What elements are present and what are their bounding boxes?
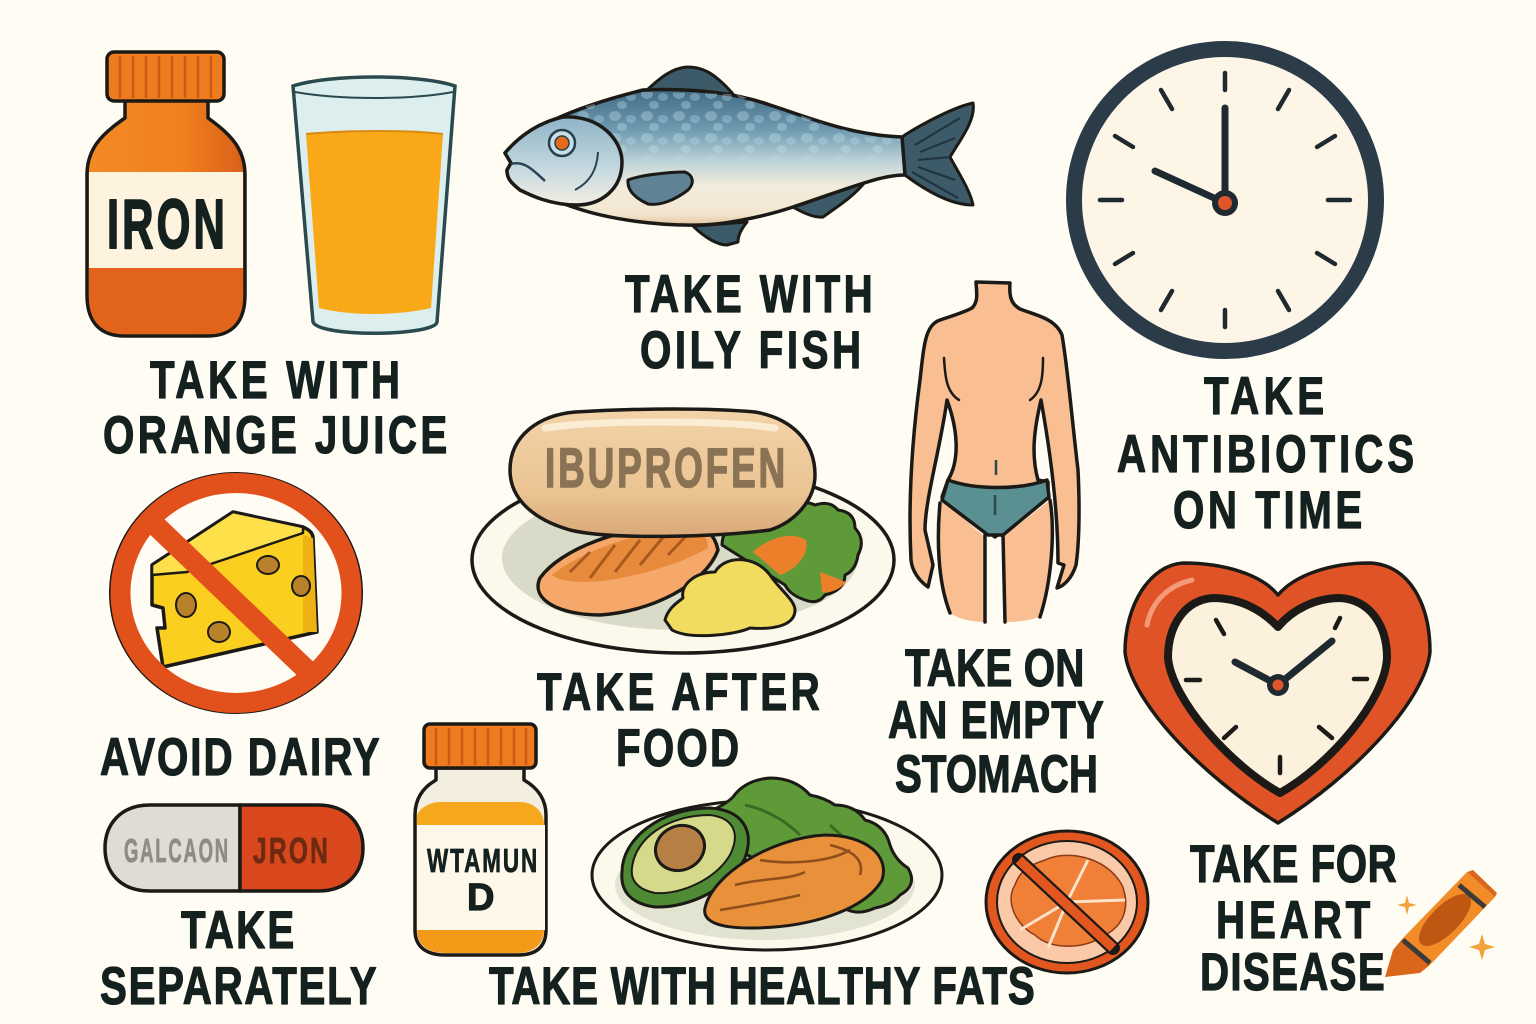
text: take with orange juice: ORANGE JUICE	[103, 405, 447, 464]
text: take separately: TAKE	[181, 900, 294, 959]
text: take for heart disease: DISEASE	[1200, 942, 1385, 1001]
text: take after food	[537, 662, 820, 777]
text: take with healthy fats: TAKE WITH HEALTHY FATS	[489, 956, 1035, 1015]
icon: calcium and iron capsule	[105, 805, 363, 891]
text: take on an empty stomach	[888, 638, 1104, 803]
text: take after food: FOOD	[616, 718, 739, 777]
text: take antibiotics on time: ANTIBIOTICS	[1117, 424, 1414, 483]
text: avoid dairy: AVOID DAIRY	[100, 727, 380, 786]
text: take on an empty stomach: STOMACH	[895, 744, 1098, 803]
text: take for heart disease: TAKE FOR	[1190, 834, 1397, 893]
text: take antibiotics on time: TAKE	[1204, 366, 1324, 425]
text: take with orange juice: TAKE WITH	[150, 350, 400, 409]
label: WTAMUN D: WTAMUN	[427, 842, 537, 879]
text: take separately: SEPARATELY	[100, 956, 377, 1015]
text: take with oily fish: OILY FISH	[640, 320, 861, 379]
icon: no grapefruit	[986, 831, 1148, 973]
icon: vitamin D bottle	[415, 724, 546, 955]
label: JRON: JRON	[253, 830, 328, 871]
text: take with oily fish: TAKE WITH	[625, 264, 873, 323]
icon: plate with ibuprofen pill and food	[472, 409, 894, 653]
text: take antibiotics on time	[1117, 366, 1414, 539]
icon: heart clock	[1125, 563, 1430, 823]
icon: human body torso	[910, 282, 1079, 622]
label: GALCAON: GALCAON	[124, 832, 228, 869]
text: take on an empty stomach: AN EMPTY	[888, 690, 1104, 749]
icon: crayon with sparkles	[1385, 870, 1497, 977]
icon: no dairy cheese	[110, 473, 362, 713]
text: take for heart disease	[1190, 834, 1397, 1001]
icon: iron bottle	[87, 52, 245, 336]
text: take for heart disease: HEART	[1216, 890, 1370, 949]
icon: oily fish	[505, 67, 973, 245]
text: take with orange juice	[103, 350, 447, 464]
icon: plate with avocado, chicken and greens	[592, 778, 942, 950]
text: take on an empty stomach: TAKE ON	[905, 638, 1084, 697]
text: take after food: TAKE AFTER	[537, 662, 820, 721]
text: take antibiotics on time: ON TIME	[1173, 480, 1362, 539]
text: take separately	[100, 900, 377, 1015]
label: WTAMUN D: D	[467, 877, 494, 919]
icon: glass of orange juice	[293, 77, 455, 333]
icon: wall clock	[1074, 49, 1376, 351]
label: WTAMUN D	[427, 842, 537, 919]
label: IRON: IRON	[107, 185, 225, 264]
text: take with oily fish	[625, 264, 873, 379]
label: IBUPROFEN: IBUPROFEN	[545, 437, 785, 500]
